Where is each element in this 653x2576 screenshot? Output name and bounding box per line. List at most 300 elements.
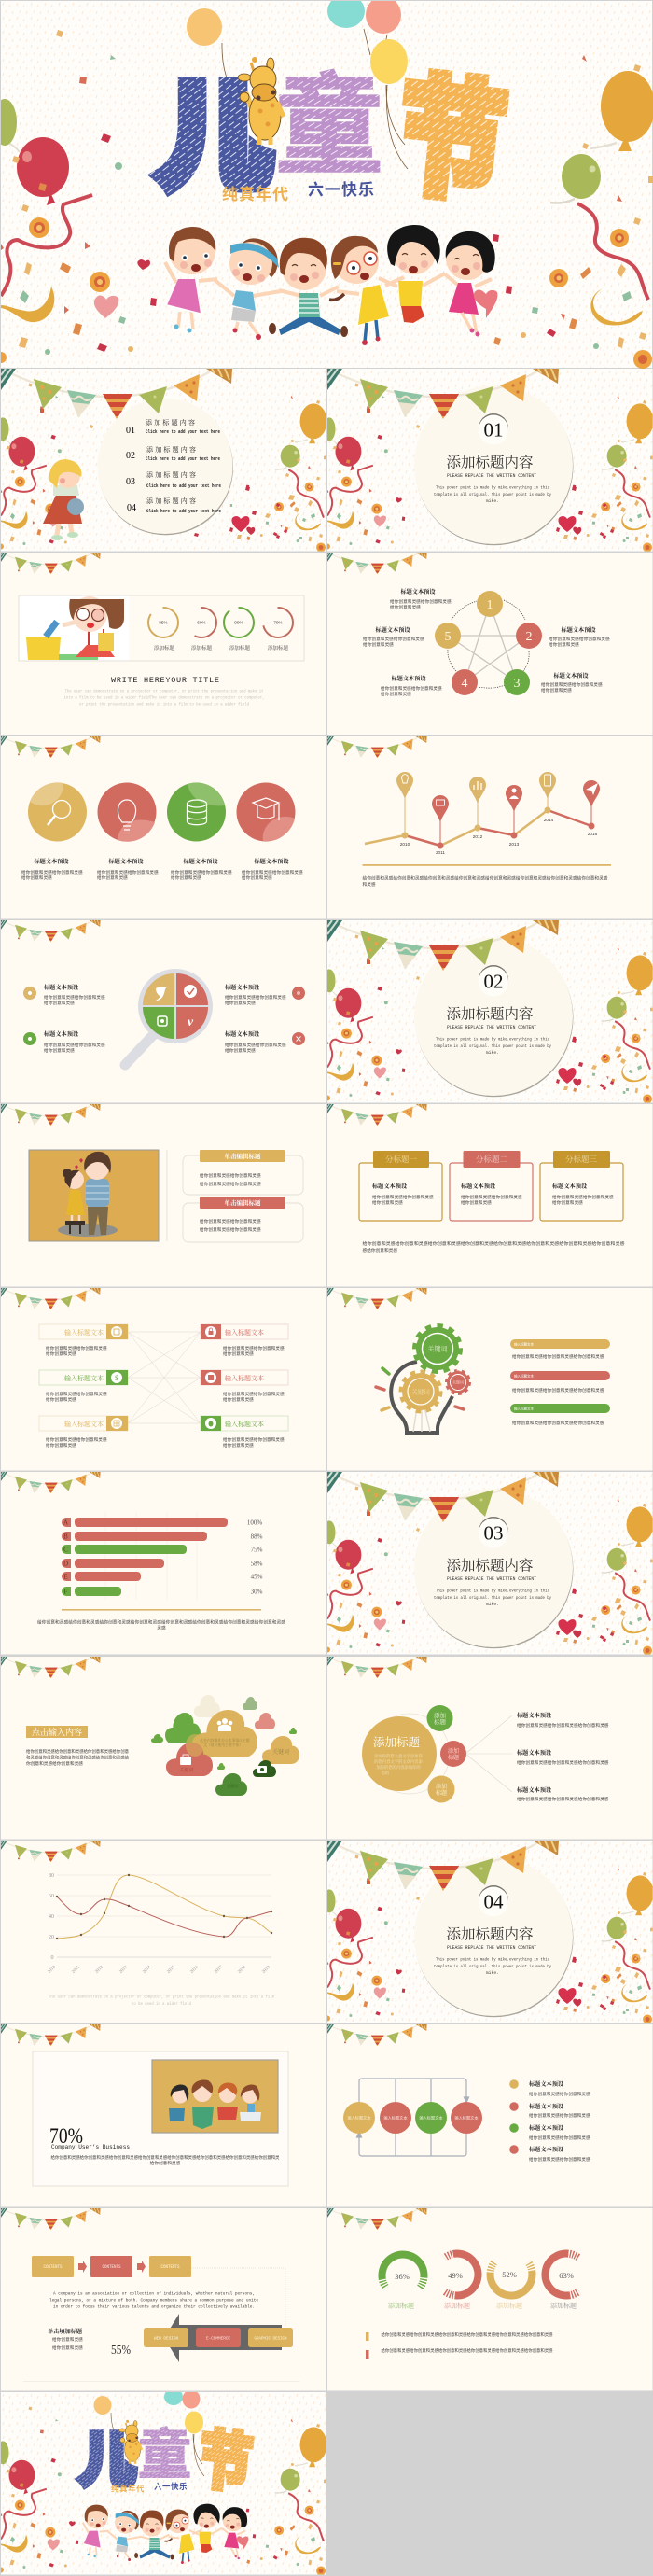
ring labels: 添加标题 <box>268 644 288 651</box>
flow boxes <box>32 2256 191 2277</box>
paragraph: 给你创意和灵感 <box>150 2160 181 2166</box>
paragraph <box>63 689 265 707</box>
box 3: 给你创意和灵感给你创意和灵感 <box>552 1194 614 1200</box>
donut labels: 添加标题 <box>444 2302 470 2309</box>
bunting <box>1 369 232 419</box>
paragraph <box>362 1240 625 1253</box>
box 2: 给你创意和灵感 <box>461 1199 492 1206</box>
section number <box>479 1885 508 1917</box>
paragraph: 给你创意和灵感给你创意和灵感给你创意和灵感给你创意和灵感给你创意和灵感给你创意和灵感给你创意和灵感给你创意和灵 <box>50 2154 280 2161</box>
node circles: 4 <box>461 677 468 691</box>
axis labels: 0 <box>50 1955 54 1961</box>
gear: gold: 关键词 <box>411 1387 430 1396</box>
illustration: six children <box>165 225 497 345</box>
legend: 给你创意和灵感给你创意和灵感 <box>529 2135 590 2141</box>
paragraph: 给你创意和灵感给你创意和灵感给你创意和灵感给你创意和灵感给你创意和灵感给你创意和灵感给你创意和灵感给你创意和灵感 <box>362 875 608 881</box>
node circles <box>435 591 542 695</box>
bunting <box>1 1288 101 1309</box>
arrow boxes <box>144 2328 293 2347</box>
percent: 55% <box>111 2344 131 2358</box>
bulb filaments <box>413 1407 430 1432</box>
descriptions: 给你创意和灵感给你创意和灵感 <box>46 1436 107 1443</box>
panel: contents flow slide <box>1 2208 326 2391</box>
circle captions: 给你创意和灵感给你创意和灵感 <box>21 869 83 875</box>
caption: to be used in a wider field <box>132 2001 191 2007</box>
title: 儿童节: 节 <box>391 35 514 226</box>
section paragraph: mike. <box>486 1970 499 1976</box>
flow nodes <box>343 2102 482 2134</box>
branch lines <box>465 1715 512 1792</box>
circle captions: 给你创意和灵感 <box>171 875 201 881</box>
item: bottom right <box>225 1030 305 1054</box>
bar values: 45% <box>251 1574 263 1581</box>
card 2: 给你创意和灵感给你创意和灵感 <box>200 1226 261 1233</box>
labels: 给你创意和灵感 <box>381 691 411 697</box>
descriptions: 给你创意和灵感 <box>46 1442 76 1449</box>
panel: section 04 <box>324 1841 653 2023</box>
sub heading: 给你创意和灵感 <box>52 2345 83 2351</box>
contents circle <box>97 399 233 535</box>
frame <box>19 595 304 661</box>
right tag 2 <box>201 1370 288 1385</box>
sub heading <box>48 2328 83 2351</box>
section number <box>479 965 508 997</box>
illustration: six children <box>83 2504 248 2564</box>
panel: section 03 <box>324 1472 653 1655</box>
paragraph: The user can demonstrate on a projector or computer, or print the presentation and make it <box>65 689 264 694</box>
box 2: 给你创意和灵感给你创意和灵感 <box>461 1194 522 1200</box>
item: top right: 给你创意和灵感 <box>225 1000 256 1006</box>
ring labels <box>154 620 288 651</box>
gold circle: 添加 <box>436 1783 447 1790</box>
axis labels: 20 <box>49 1935 54 1940</box>
left tag 2: 输入标题文本 <box>64 1374 104 1382</box>
left tag 1: 输入标题文本 <box>64 1328 104 1337</box>
axis labels <box>47 1873 271 1975</box>
gear: red <box>446 1370 470 1394</box>
arrow boxes: GRAPHIC DESIGN <box>254 2335 287 2341</box>
sub heading: 给你创意和灵感 <box>52 2336 83 2343</box>
progress rings <box>148 608 293 637</box>
paragraph: A company is an association or collection of individuals, whether natural persons, <box>53 2292 255 2296</box>
circle captions: 给你创意和灵感 <box>242 875 272 881</box>
item: top left: 标题文本预设 <box>44 984 79 991</box>
left tag 1 <box>39 1324 128 1339</box>
section number: 04 <box>483 1891 504 1913</box>
caption <box>49 1994 274 2007</box>
contents list: 01 <box>126 426 135 436</box>
descriptions: 给你创意和灵感给你创意和灵感 <box>223 1391 285 1397</box>
item: bottom left <box>23 1030 105 1054</box>
box 1: 给你创意和灵感 <box>372 1199 403 1206</box>
gold circle: 标题 <box>436 1789 447 1797</box>
grid lines <box>57 1875 271 1937</box>
flow boxes: CONTENTS <box>160 2264 179 2270</box>
donut 63%: 63% <box>559 2271 574 2280</box>
box 3 <box>540 1151 623 1221</box>
axis labels: 2016 <box>189 1965 200 1975</box>
bunting <box>1 1657 101 1678</box>
bunting <box>327 553 427 574</box>
section circle <box>414 937 573 1097</box>
circle: database <box>167 782 226 842</box>
contents list: Click here to add your text here <box>146 509 221 514</box>
balloon: yellow <box>370 39 408 84</box>
timeline line <box>365 780 591 846</box>
paragraph: 感给你创意和灵感 <box>362 1247 397 1253</box>
axis labels: 2015 <box>166 1965 176 1975</box>
title: 儿童节: 童 <box>138 2411 191 2489</box>
right tag 2: 输入标题文本 <box>225 1374 264 1382</box>
section paragraph: template is all original. This power point is made by <box>434 1043 551 1049</box>
illustration: girl with hat <box>43 459 84 540</box>
year labels <box>400 818 598 855</box>
left tag 2 <box>39 1370 128 1385</box>
subtitle: 纯真年代 <box>111 2483 145 2494</box>
contents list: 添加标题内容 <box>146 497 198 505</box>
right tag 1 <box>201 1324 288 1339</box>
descriptions: 给你创意和灵感给你创意和灵感 <box>223 1345 285 1351</box>
heading: WRITE HEREYOUR TITLE <box>111 676 219 685</box>
section paragraph: mike. <box>486 498 499 504</box>
divider <box>166 1150 168 1241</box>
bunting <box>1 920 101 942</box>
labels: 给你创意和灵感给你创意和灵感 <box>541 681 603 688</box>
section paragraph: This power point is made by mike.everything in this <box>436 1589 549 1594</box>
year labels: 2013 <box>509 842 520 847</box>
box 1: 给你创意和灵感给你创意和灵感 <box>372 1194 434 1200</box>
section number <box>479 413 508 444</box>
section paragraph: mike. <box>486 1050 499 1056</box>
item: top left <box>23 984 105 1006</box>
section heading: 添加标题内容 <box>446 1926 534 1943</box>
red circle <box>440 1741 466 1767</box>
node circles: 2 <box>526 630 532 644</box>
labels: 给你创意和灵感 <box>363 641 394 648</box>
paragraph <box>26 1748 129 1767</box>
ring labels: 添加标题 <box>154 644 174 651</box>
section paragraph: template is all original. This power point is made by <box>434 492 551 497</box>
node circles: 3 <box>513 677 521 691</box>
illustration: girl recycling <box>19 595 129 661</box>
subtitle: 六一快乐 <box>308 176 375 200</box>
contents list: 添加标题内容 <box>146 470 198 479</box>
legend: 给你创意和灵感给你创意和灵感给你创意和灵感给你创意和灵感给你创意和灵感给你创意和灵感 <box>381 2347 553 2354</box>
paragraph: 和灵感 <box>362 881 376 888</box>
donut labels <box>388 2302 577 2309</box>
paragraph <box>362 875 608 888</box>
data points <box>56 1874 272 1939</box>
card 1: 单击编辑标题 <box>224 1152 261 1160</box>
legend: 标题文本预设 <box>529 2103 564 2110</box>
section number <box>479 1517 508 1547</box>
photo: couple illustration <box>29 1150 159 1241</box>
axis labels: 60 <box>49 1894 54 1899</box>
red circle: 标题 <box>448 1754 459 1761</box>
donut 49% <box>428 2246 486 2303</box>
right tag 1: 输入标题文本 <box>225 1328 264 1337</box>
cloud labels: 关键词 <box>272 1748 289 1756</box>
left tag 3 <box>39 1416 128 1431</box>
descriptions: 给你创意和灵感给你创意和灵感 <box>46 1391 107 1397</box>
pill 2: 输入标题文本 <box>514 1374 534 1378</box>
donut 49%: 49% <box>448 2271 463 2280</box>
legend: 给你创意和灵感给你创意和灵感 <box>529 2091 590 2097</box>
labels: 给你创意和灵感给你创意和灵感 <box>381 685 442 692</box>
grey arrow <box>164 2314 282 2362</box>
gold circle <box>427 1775 455 1803</box>
bunting <box>327 1288 427 1309</box>
labels: 给你创意和灵感 <box>541 687 572 693</box>
gear: green: 关键词 <box>427 1344 448 1353</box>
panel: donuts slide <box>327 2208 653 2391</box>
loop connectors <box>356 2079 468 2156</box>
panel: progress rings slide <box>1 553 326 735</box>
donut labels: 添加标题 <box>550 2302 577 2309</box>
section subtitle: PLEASE REPLACE THE WRITTEN CONTENT <box>447 1576 536 1582</box>
panel: closing slide <box>0 2388 327 2575</box>
title: 儿童节: 童 <box>275 38 383 195</box>
section paragraph: mike. <box>486 1602 499 1607</box>
large gold circle: 加你的您的内容添加你的 <box>376 1764 421 1771</box>
panel: clouds slide <box>1 1657 326 1839</box>
card 1: 给你创意和灵感给你创意和灵感 <box>200 1181 261 1187</box>
gear: gold <box>401 1372 440 1411</box>
box 3: 标题文本预设 <box>552 1183 588 1190</box>
item: bottom right: 给你创意和灵感 <box>225 1047 256 1054</box>
item: top right: 给你创意和灵感给你创意和灵感 <box>225 994 286 1001</box>
title: 儿童节: 节 <box>196 2408 257 2504</box>
flow boxes: CONTENTS <box>103 2264 121 2270</box>
magnifier quadrants <box>143 973 208 1039</box>
year labels: 2016 <box>588 832 598 836</box>
node circles: 5 <box>444 630 452 644</box>
panel: circles with branches slide <box>327 1657 653 1839</box>
section paragraph <box>434 1589 551 1605</box>
section paragraph: This power point is made by mike.everything in this <box>436 1956 549 1962</box>
branch labels: 给你创意和灵感给你创意和灵感给你创意和灵感 <box>517 1796 609 1802</box>
subheading: Company User’s Business <box>51 2144 130 2150</box>
left tag 2: $ <box>115 1374 118 1382</box>
card 2: 单击编辑标题 <box>224 1198 261 1207</box>
contents list: 02 <box>126 451 135 461</box>
circle captions: 标题文本预设 <box>183 858 218 865</box>
title: 儿童节: 儿 <box>79 2414 136 2497</box>
contents list: 04 <box>127 503 136 513</box>
donut 36%: 36% <box>395 2272 410 2281</box>
legend: 标题文本预设 <box>529 2146 564 2153</box>
section subtitle: PLEASE REPLACE THE WRITTEN CONTENT <box>447 473 536 479</box>
bunting <box>1 2208 101 2230</box>
node circles: 1 <box>487 598 493 612</box>
year labels: 2010 <box>400 842 410 847</box>
legend <box>366 2331 553 2359</box>
circle captions: 给你创意和灵感 <box>97 875 128 881</box>
donut 52%: 52% <box>502 2270 517 2279</box>
paragraph: 给你创意和灵感给你创意和灵感给你创意和灵感给你创意和灵感给你创意和灵感给你创意和灵感给你创意和灵感给你创意和灵感 <box>362 1240 625 1247</box>
decorations <box>324 1855 653 2023</box>
item: bottom left: 给你创意和灵感 <box>44 1047 75 1054</box>
box 1: 标题文本预设 <box>372 1183 408 1190</box>
bunting <box>327 369 559 419</box>
bulb outline <box>391 1362 452 1433</box>
axis labels: 2010 <box>47 1965 57 1975</box>
cloud cluster <box>151 1695 299 1796</box>
bottom rule <box>23 2380 299 2383</box>
contents list: 03 <box>126 477 135 487</box>
panel: 70 percent slide <box>1 2024 326 2206</box>
box 3: 分标题三 <box>565 1155 597 1164</box>
box 2: 标题文本预设 <box>461 1183 496 1190</box>
section number: 01 <box>483 418 504 441</box>
large gold circle: 添加标题 <box>373 1735 420 1749</box>
card 2 <box>183 1197 303 1242</box>
panel: section 02 <box>324 920 653 1103</box>
circle captions: 给你创意和灵感给你创意和灵感 <box>242 869 303 875</box>
dashed arrows <box>448 600 529 688</box>
bunting <box>1 1104 101 1126</box>
branch labels <box>517 1712 609 1802</box>
bar chart <box>62 1518 228 1596</box>
descriptions: 给你创意和灵感 <box>223 1396 254 1403</box>
arrow boxes: E-COMMERCE <box>206 2335 230 2341</box>
paragraph <box>49 2292 258 2309</box>
title: 儿童节 <box>147 67 509 202</box>
line chart series <box>57 1875 271 1939</box>
bunting <box>327 736 427 758</box>
box 3: 给你创意和灵感 <box>552 1199 583 1206</box>
circle captions: 给你创意和灵感 <box>21 875 52 881</box>
bunting <box>327 920 559 971</box>
paragraph: into a film to be used in a wider fieldThe user can demonstrate on a projector or computer, <box>63 694 265 700</box>
balloon: yellow <box>185 2412 203 2434</box>
bar values: 88% <box>251 1533 263 1540</box>
cloud labels: 此处内容操作办公室事情让主题 <box>200 1738 250 1743</box>
bar chart: C <box>63 1546 68 1553</box>
panel: three boxes slide <box>327 1104 653 1286</box>
paragraph: or print the presentation and make it into a film to be used in a wider field <box>79 702 249 707</box>
paragraph: 灵感 <box>157 1624 166 1631</box>
bunting <box>327 2024 427 2046</box>
pill 1: 给你创意和灵感给你创意和灵感给你创意和灵感 <box>512 1353 604 1360</box>
section heading: 添加标题内容 <box>446 1557 534 1574</box>
axis labels: 2013 <box>118 1965 129 1975</box>
contents list: Click here to add your text here <box>146 483 221 489</box>
subtitle <box>222 181 373 202</box>
circle captions: 标题文本预设 <box>108 858 144 865</box>
contents list <box>126 418 221 514</box>
bar values: 100% <box>247 1519 262 1527</box>
paragraph: in order to focus their various talents and organize their collectively available. <box>53 2305 255 2309</box>
bar chart: A <box>63 1519 68 1527</box>
descriptions: 给你创意和灵感给你创意和灵感 <box>46 1345 107 1351</box>
panel: pentagram slide <box>327 553 653 735</box>
item: top left: 给你创意和灵感 <box>44 1000 75 1006</box>
section paragraph: template is all original. This power point is made by <box>434 1964 551 1969</box>
cloud labels: 关键词 <box>227 1783 238 1788</box>
descriptions <box>46 1345 285 1449</box>
heading tag <box>26 1726 88 1738</box>
title: 儿童节 <box>79 2408 257 2504</box>
caption: The user can demonstrate on a projector or computer, or print the presentation and make it into a film <box>49 1994 274 1999</box>
axis labels: 2018 <box>237 1965 247 1975</box>
labels: 给你创意和灵感给你创意和灵感 <box>549 636 610 642</box>
bar chart: D <box>63 1561 68 1568</box>
axis labels: 2014 <box>142 1965 152 1975</box>
section circle <box>414 1857 573 2017</box>
donut 63% <box>537 2246 595 2303</box>
pill 1 <box>510 1339 610 1360</box>
section paragraph <box>434 1956 551 1976</box>
green circle: 添加 <box>434 1711 446 1719</box>
axis labels: 2012 <box>94 1965 104 1975</box>
legend: 给你创意和灵感给你创意和灵感 <box>529 2112 590 2119</box>
decorations <box>0 2406 327 2575</box>
bunting <box>327 1657 427 1678</box>
panel: line chart slide <box>1 1841 326 2023</box>
labels: 标题文本预设 <box>400 588 436 595</box>
axis labels: 2019 <box>261 1965 271 1975</box>
pill 1: 输入标题文本 <box>514 1342 534 1346</box>
sub heading: 单击填加标题 <box>48 2328 83 2335</box>
right tag 3: 输入标题文本 <box>225 1420 264 1428</box>
card 1 <box>183 1150 303 1195</box>
circle captions: 给你创意和灵感给你创意和灵感 <box>171 869 232 875</box>
subtitle: 纯真年代 <box>222 181 289 204</box>
circle captions: 给你创意和灵感给你创意和灵感 <box>97 869 159 875</box>
year labels: 2011 <box>436 850 445 855</box>
section heading: 添加标题内容 <box>446 454 534 470</box>
section paragraph <box>434 485 551 502</box>
labels <box>363 588 610 697</box>
labels: 给你创意和灵感给你创意和灵感 <box>363 636 424 642</box>
pill 3: 给你创意和灵感给你创意和灵感给你创意和灵感 <box>512 1420 604 1426</box>
ring labels: 添加标题 <box>229 644 250 651</box>
bunting <box>327 1104 427 1126</box>
branch labels: 标题文本预设 <box>517 1749 552 1757</box>
section paragraph <box>434 1037 551 1054</box>
bar values: 58% <box>251 1561 263 1568</box>
legend: 给你创意和灵感给你创意和灵感 <box>529 2156 590 2163</box>
legend: 标题文本预设 <box>529 2080 564 2088</box>
large gold circle: 添加你的您大意文字添加你 <box>374 1753 423 1759</box>
decorations <box>324 934 653 1103</box>
bar values <box>247 1519 263 1596</box>
green circle: 标题 <box>434 1717 446 1726</box>
bar values: 30% <box>251 1589 263 1596</box>
heading tag: 点击输入内容 <box>32 1727 82 1737</box>
branch labels: 标题文本预设 <box>517 1712 552 1719</box>
frame <box>33 2051 288 2186</box>
cloud labels: 文（建议使用主题字体）。 <box>203 1743 246 1747</box>
panel: magnifier slide <box>1 920 326 1103</box>
panel: cover slide <box>0 0 653 369</box>
donut labels: 添加标题 <box>496 2302 522 2309</box>
circle: graduation cap <box>237 782 295 842</box>
panel: connection slide <box>1 1288 326 1471</box>
icon: giraffe <box>238 57 284 145</box>
panel: contents slide <box>0 369 327 552</box>
timeline pins <box>396 772 600 849</box>
legend: 标题文本预设 <box>529 2124 564 2132</box>
donut labels: 添加标题 <box>388 2302 414 2309</box>
section number: 02 <box>483 971 504 993</box>
title: 儿童节: 儿 <box>158 45 271 210</box>
bar chart: F <box>64 1589 68 1596</box>
flow nodes: 输入标题文本 <box>419 2115 443 2121</box>
axis labels: 2017 <box>214 1965 224 1975</box>
magnifier quadrants: v <box>188 1015 194 1029</box>
